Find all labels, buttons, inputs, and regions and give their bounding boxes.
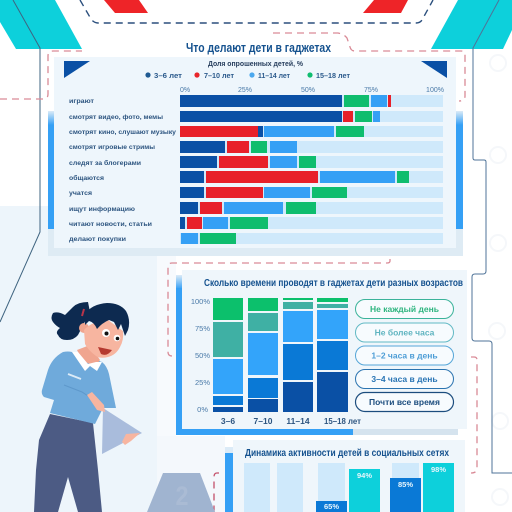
row labels xyxy=(69,98,176,243)
bar values: 85% xyxy=(398,480,413,489)
trousers xyxy=(34,414,102,512)
red shape right xyxy=(363,0,408,13)
red dashed frame right of second panel xyxy=(471,357,477,473)
pocket stripe xyxy=(68,374,81,379)
row labels: общаются xyxy=(69,174,104,182)
bar chart xyxy=(244,463,454,512)
panel: time in gadgets by age xyxy=(176,270,467,435)
panel title: Динамика активности детей в социальных сетях xyxy=(245,447,449,459)
corner triangle right xyxy=(421,61,447,78)
legend: 7–10 лет xyxy=(204,73,235,80)
column 11–14 xyxy=(283,298,313,412)
row labels: смотрят игровые стримы xyxy=(69,144,155,151)
arm crease xyxy=(64,385,88,396)
outline line left xyxy=(0,0,40,322)
axis labels: 50% xyxy=(301,87,315,94)
grey pedestal with number 2 xyxy=(147,473,215,512)
left accent bar xyxy=(48,111,54,229)
red dashed frame around first panel xyxy=(0,33,465,101)
legend xyxy=(145,72,351,80)
y axis labels: 25% xyxy=(195,378,210,387)
neck xyxy=(77,345,100,367)
row labels: ищут информацию xyxy=(69,206,135,213)
axis labels: 25% xyxy=(238,87,252,94)
hair tie xyxy=(82,309,84,316)
collar xyxy=(72,352,102,371)
corner triangle left xyxy=(64,61,90,78)
bar values: 98% xyxy=(431,465,446,474)
legend: 15–18 лет xyxy=(316,73,351,80)
red shape left xyxy=(104,0,148,13)
y axis labels xyxy=(191,297,210,414)
red dashed frame around third panel xyxy=(214,473,219,512)
stacked bar chart xyxy=(180,95,443,244)
bar values xyxy=(324,465,446,511)
x axis labels: 11–14 xyxy=(286,416,310,426)
cyan corner left xyxy=(0,0,82,49)
y axis labels: 0% xyxy=(197,405,208,414)
row labels: делают покупки xyxy=(69,236,126,243)
axis labels: 75% xyxy=(364,87,378,94)
head hair xyxy=(85,303,129,336)
stacked column chart xyxy=(213,298,348,412)
row labels: играют xyxy=(69,98,94,105)
sweater xyxy=(42,352,116,424)
y axis labels: 100% xyxy=(191,297,210,306)
lower background xyxy=(0,206,225,512)
x axis labels xyxy=(221,416,361,426)
mouth xyxy=(98,347,112,355)
red dashed frame around second panel xyxy=(168,259,390,356)
column 7–10 xyxy=(248,298,278,412)
navy dashed top frame xyxy=(80,0,433,23)
watermark circles xyxy=(489,55,508,505)
ponytail xyxy=(52,302,90,340)
pill: not every day: Не каждый день xyxy=(370,304,439,314)
x axis labels: 7–10 xyxy=(254,416,273,426)
column 15–18 xyxy=(317,298,348,412)
legend pills xyxy=(356,300,454,412)
row labels: смотрят кино, слушают музыку xyxy=(69,129,176,136)
right accent bar xyxy=(456,111,463,229)
title: Что делают дети в гаджетах xyxy=(186,40,332,55)
outline line right xyxy=(472,0,512,473)
illustration: girl with paper xyxy=(34,302,142,512)
eyes xyxy=(102,329,120,341)
axis labels: 0% xyxy=(180,87,190,94)
ear xyxy=(79,323,89,333)
panel: what children do in gadgets xyxy=(48,57,463,256)
pill: 1–2 hours: 1–2 часа в день xyxy=(371,350,438,360)
accent bars xyxy=(176,275,458,435)
y axis labels: 50% xyxy=(195,351,210,360)
panel shadow xyxy=(48,229,463,256)
accent bar xyxy=(225,447,233,512)
x axis labels: 3–6 xyxy=(221,416,235,426)
chart subtitle: Доля опрошенных детей, % xyxy=(208,60,304,68)
row labels: читают новости, статьи xyxy=(69,221,152,228)
pill: up to an hour: Не более часа xyxy=(375,328,435,338)
panel: social network activity xyxy=(225,440,465,512)
legend: 11–14 лет xyxy=(258,73,291,80)
pill: almost all the time: Почти все время xyxy=(369,397,440,407)
legend: 3–6 лет xyxy=(154,73,183,80)
column 3–6 xyxy=(213,298,243,412)
row labels: смотрят видео, фото, мемы xyxy=(69,114,163,121)
pill: 3–4 hours: 3–4 часа в день xyxy=(371,374,438,384)
hands xyxy=(87,392,140,445)
bar values: 65% xyxy=(324,502,339,511)
face xyxy=(84,320,123,358)
row labels: следят за блогерами xyxy=(69,159,141,167)
cyan corner right xyxy=(431,0,512,49)
paper xyxy=(102,408,142,454)
row labels: учатся xyxy=(69,190,92,197)
grey pedestal with number 2: 2 xyxy=(176,481,188,511)
bar values: 94% xyxy=(357,471,372,480)
axis labels: 100% xyxy=(426,87,444,94)
axis labels xyxy=(180,87,444,94)
x axis labels: 15–18 лет xyxy=(324,416,361,426)
y axis labels: 75% xyxy=(195,324,210,333)
